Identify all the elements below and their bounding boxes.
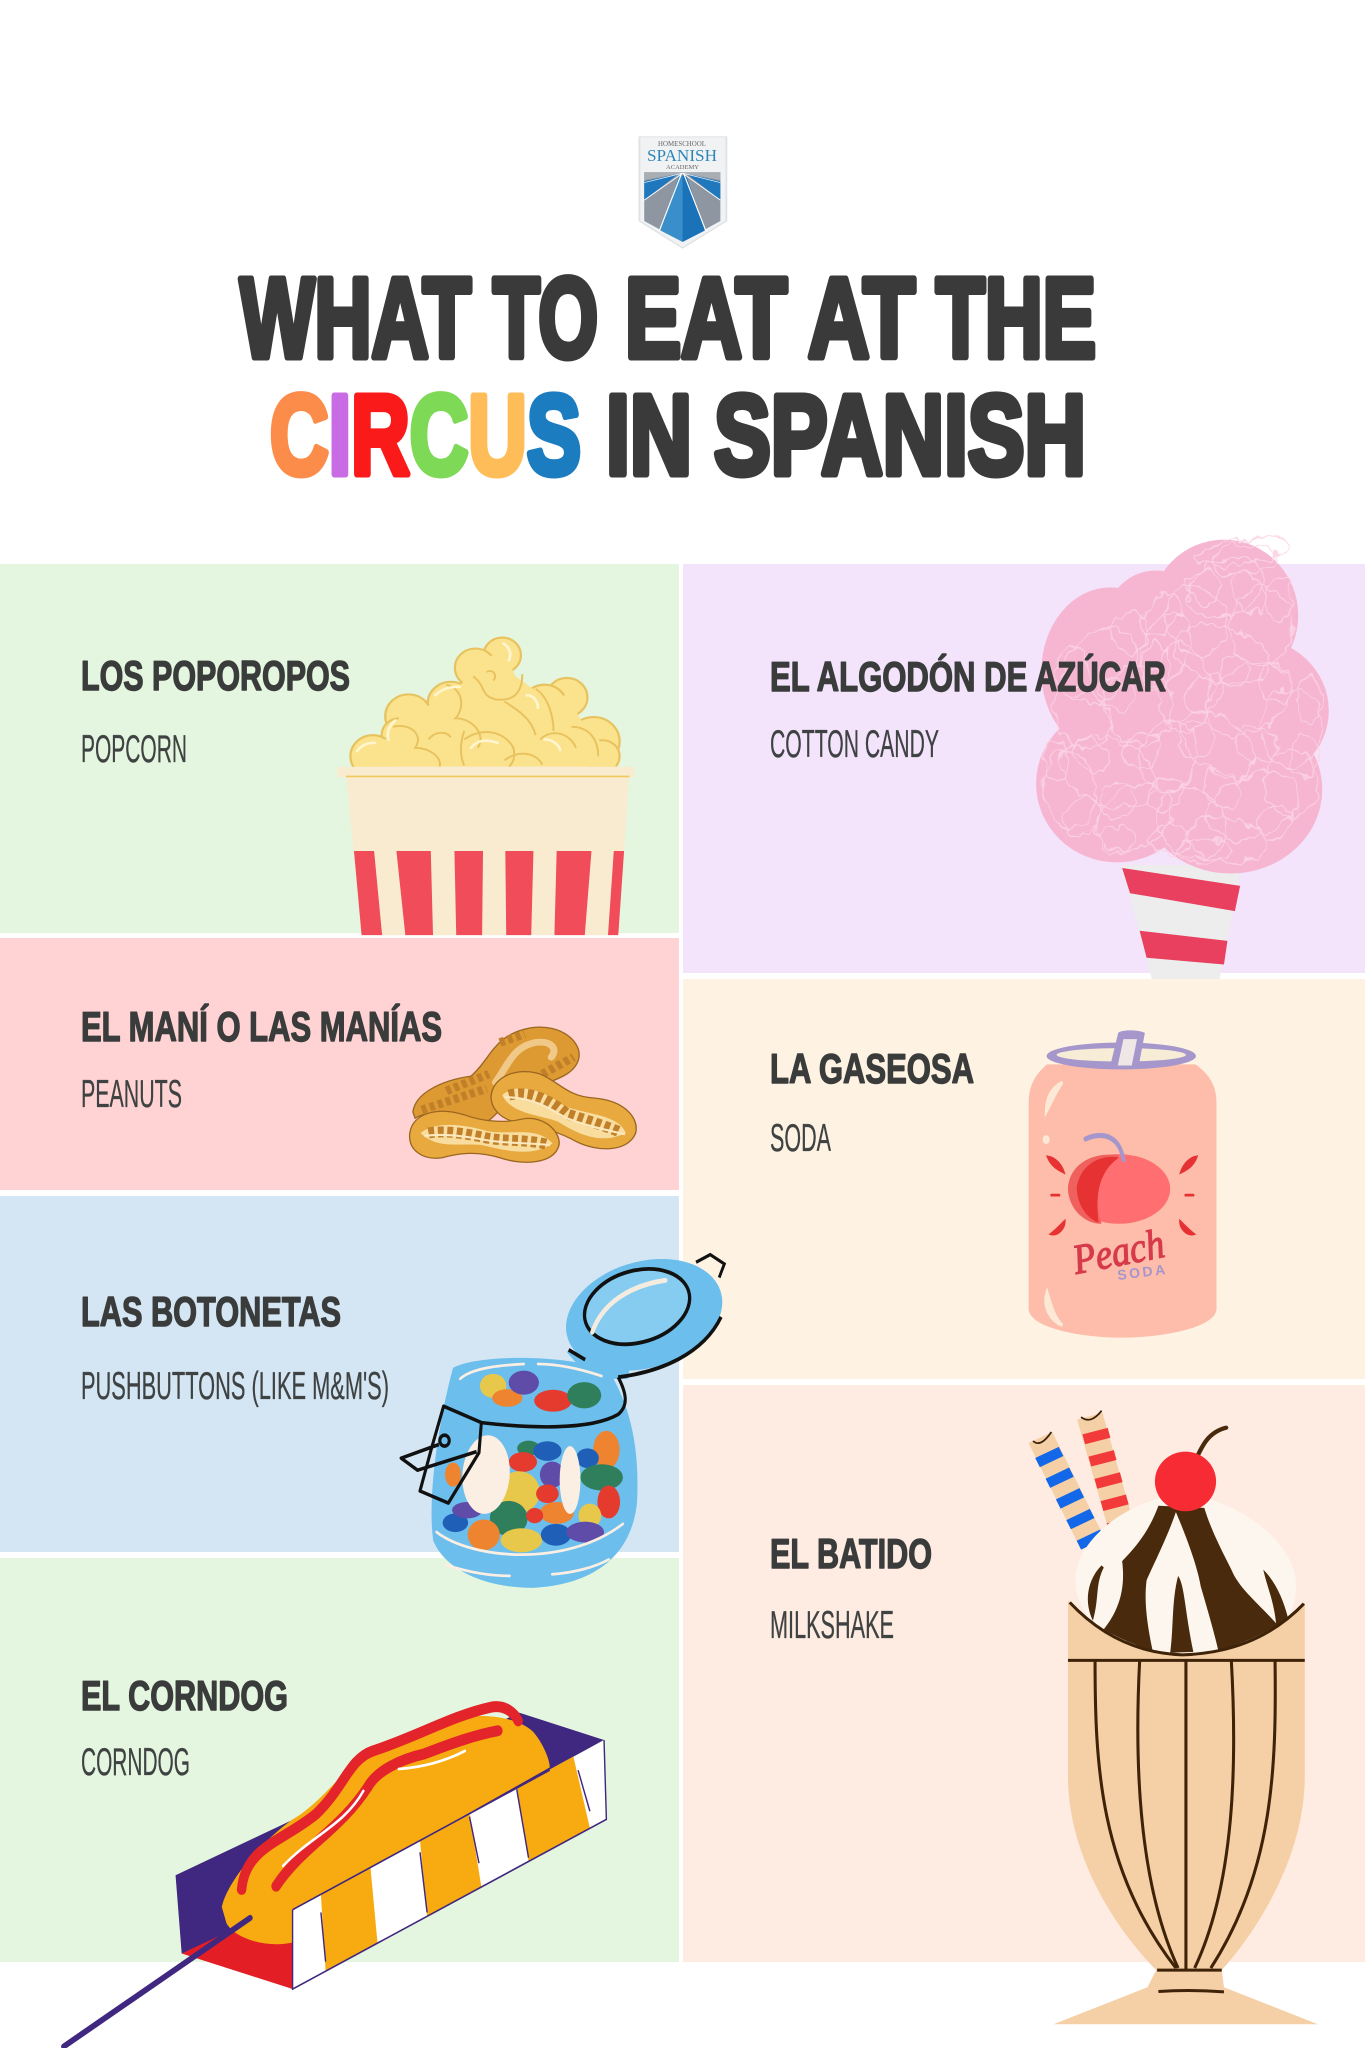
- panel: peanuts background: [0, 938, 679, 1190]
- juice splats: [1048, 1157, 1196, 1234]
- label: el maní o las manías: EL MANÍ O LAS MANÍAS: [81, 1003, 442, 1050]
- label: el corndog: EL CORNDOG: [81, 1672, 288, 1719]
- jar highlights: [437, 1364, 623, 1576]
- corndog body: [222, 1716, 550, 1944]
- title line 2: SPANISH: [714, 372, 1086, 498]
- title line 1: AT: [808, 255, 915, 381]
- title line 1: WHAT: [240, 255, 471, 381]
- bucket rim line: [346, 774, 629, 778]
- panel: corndog background: [0, 1558, 679, 1962]
- blue wafer straw: [1033, 1432, 1093, 1544]
- logo text: academy: ACADEMY: [666, 165, 700, 171]
- peach stem: [1085, 1135, 1123, 1160]
- panel: soda background: [683, 979, 1365, 1379]
- jar body: [432, 1358, 637, 1588]
- jar lid: [557, 1243, 731, 1386]
- label: cotton candy: COTTON CANDY: [770, 723, 939, 766]
- label: el algodón de azúcar: EL ALGODÓN DE AZÚCAR: [770, 652, 1166, 700]
- label: soda: SODA: [770, 1117, 831, 1160]
- mustard line: [276, 1731, 498, 1886]
- icon: corndog: [64, 1707, 606, 2047]
- glass lines: [1068, 1602, 1305, 1992]
- bucket body: [346, 773, 629, 935]
- panel: milkshake background: [683, 1385, 1365, 1962]
- title line 2: [270, 372, 1086, 498]
- glass: [1054, 1601, 1318, 2024]
- label: popcorn: POPCORN: [81, 728, 187, 771]
- icon: candy jar: [401, 1243, 731, 1588]
- ice cream scoop: [1075, 1495, 1296, 1653]
- title: [240, 255, 1096, 498]
- label: las botonetas: LAS BOTONETAS: [81, 1288, 341, 1335]
- floss scribbles: [1037, 530, 1327, 870]
- title line 1: THE: [936, 255, 1096, 381]
- popcorn inner curves: [393, 671, 598, 767]
- icon: popcorn bucket: [337, 638, 634, 935]
- can highlights: [1046, 1082, 1062, 1325]
- title line 2: IN: [606, 372, 692, 498]
- ketchup: [242, 1707, 518, 1889]
- label: pushbuttons: PUSHBUTTONS (LIKE M&M'S): [81, 1365, 389, 1408]
- label: la gaseosa: LA GASEOSA: [770, 1045, 974, 1092]
- can label: soda: SODA: [1116, 1261, 1166, 1283]
- red wafer straw: [1081, 1411, 1121, 1527]
- panel: cotton candy background: [683, 564, 1365, 973]
- box back panel: [176, 1713, 604, 1953]
- highlight: [283, 1751, 465, 1866]
- label: el batido: EL BATIDO: [770, 1530, 932, 1577]
- can tab: [1110, 1030, 1145, 1065]
- jar rim and clasp: [401, 1377, 625, 1503]
- chocolate drips: [1088, 1506, 1288, 1653]
- lower left peanut: [410, 1111, 559, 1162]
- title line 1: TO: [493, 255, 598, 381]
- box red floor: [182, 1901, 293, 1989]
- bucket rim: [337, 767, 634, 777]
- popcorn outer kernels: [350, 638, 620, 777]
- candies: [443, 1371, 623, 1552]
- icon: cotton candy: [1036, 530, 1329, 979]
- box front stripes: [293, 1740, 606, 1989]
- popcorn highlights: [357, 643, 560, 751]
- bucket stripes: [354, 851, 624, 935]
- candy floss: [1036, 540, 1329, 874]
- title line 2: CIRCUS: [270, 372, 581, 498]
- label: peanuts: PEANUTS: [81, 1073, 182, 1116]
- popcorn mound: [355, 653, 616, 767]
- stick: [64, 1918, 250, 2047]
- label: corndog: CORNDOG: [81, 1741, 190, 1784]
- title line 1: EAT: [625, 255, 787, 381]
- paper cone: [1121, 865, 1241, 979]
- cherry: [1155, 1428, 1226, 1511]
- panel: candy background: [0, 1196, 679, 1552]
- peach fruit: [1068, 1154, 1170, 1224]
- logo: Homeschool Spanish Academy shield: [639, 137, 726, 248]
- icon: peanuts: [410, 1027, 636, 1162]
- right peanut: [491, 1072, 636, 1149]
- label: milkshake: MILKSHAKE: [770, 1604, 894, 1647]
- label: los poporopos: LOS POPOROPOS: [81, 652, 350, 699]
- icon: milkshake: [1033, 1411, 1318, 2024]
- can body: [1029, 1064, 1217, 1338]
- can label: peach: Peach: [1068, 1221, 1168, 1284]
- upper peanut: [413, 1027, 579, 1125]
- can lid: [1047, 1042, 1196, 1069]
- title line 1: [240, 255, 1096, 381]
- icon: peach soda can: [1029, 1030, 1217, 1338]
- logo text: spanish: SPANISH: [647, 146, 717, 165]
- logo text: homeschool: HOMESCHOOL: [658, 140, 706, 148]
- panel: popcorn background: [0, 564, 679, 933]
